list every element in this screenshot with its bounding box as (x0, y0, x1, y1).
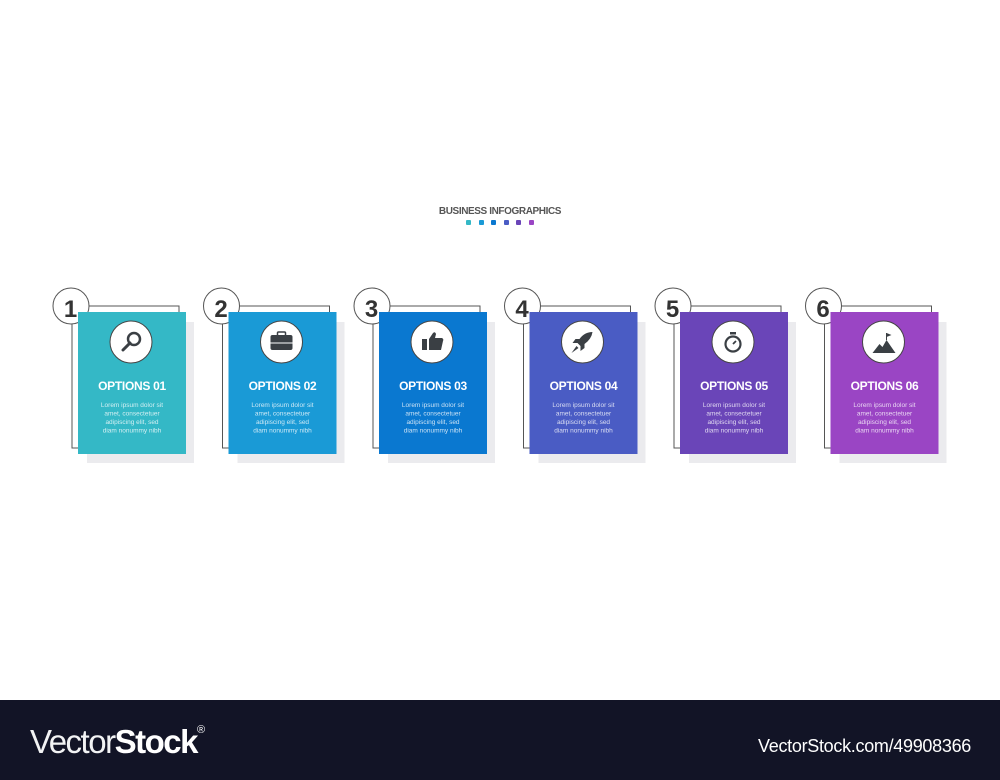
heading: OPTIONS 04 (550, 379, 618, 393)
footer bar: ® (197, 724, 205, 736)
text block: diam nonummy nibh (554, 428, 613, 434)
text block: amet, consectetuer (857, 410, 913, 418)
text block: adipiscing elit, sed (858, 419, 911, 426)
number 2: 2 (214, 296, 227, 323)
footer bar (0, 700, 1000, 780)
number 5: 5 (666, 296, 679, 323)
footer bar: VectorStock.com/49908366 (758, 736, 971, 756)
text block: Lorem ipsum dolor sit (853, 402, 916, 409)
text block: Lorem ipsum dolor sit (552, 402, 615, 409)
text block: adipiscing elit, sed (406, 419, 460, 426)
text block: diam nonummy nibh (855, 428, 914, 434)
text block: amet, consectetuer (255, 410, 311, 418)
text block: amet, consectetuer (104, 410, 160, 418)
text block: diam nonummy nibh (103, 428, 162, 434)
heading: OPTIONS 02 (249, 379, 317, 393)
text block: Lorem ipsum dolor sit (703, 402, 765, 409)
icon: mountain flag (862, 321, 904, 363)
text block: Lorem ipsum dolor sit (402, 402, 464, 409)
text block: Lorem ipsum dolor sit (101, 402, 163, 409)
number 1: 1 (64, 296, 77, 323)
text block: adipiscing elit, sed (256, 419, 309, 426)
number 6: 6 (816, 296, 829, 323)
text block: adipiscing elit, sed (557, 419, 610, 426)
text block: diam nonummy nibh (705, 428, 764, 434)
heading: OPTIONS 05 (700, 379, 768, 393)
panel: option 1 (53, 288, 194, 463)
text block: diam nonummy nibh (253, 428, 312, 434)
number 3: 3 (365, 296, 378, 323)
icon: thumbs up (411, 321, 453, 363)
title (439, 206, 562, 225)
text block: Lorem ipsum dolor sit (251, 402, 314, 409)
text block: amet, consectetuer (556, 410, 612, 418)
panel: option 2 (204, 288, 344, 463)
text block: adipiscing elit, sed (105, 419, 159, 426)
panel: option 6 (806, 288, 946, 463)
heading: OPTIONS 06 (851, 379, 919, 393)
panel: option 5 (655, 288, 796, 463)
text block: adipiscing elit, sed (707, 419, 761, 426)
icon: magnifier (110, 321, 152, 363)
text block: amet, consectetuer (405, 410, 461, 418)
text block: amet, consectetuer (706, 410, 762, 418)
icon: rocket (562, 321, 604, 363)
panel: option 3 (354, 288, 495, 463)
icon: stopwatch (712, 321, 754, 363)
heading: OPTIONS 03 (399, 379, 467, 393)
icon: briefcase (260, 321, 302, 363)
title: BUSINESS INFOGRAPHICS (439, 206, 562, 217)
text block: diam nonummy nibh (404, 428, 463, 434)
footer bar: VectorStock (30, 723, 197, 760)
heading: OPTIONS 01 (98, 379, 166, 393)
number 4: 4 (515, 296, 529, 323)
panel: option 4 (504, 288, 646, 463)
